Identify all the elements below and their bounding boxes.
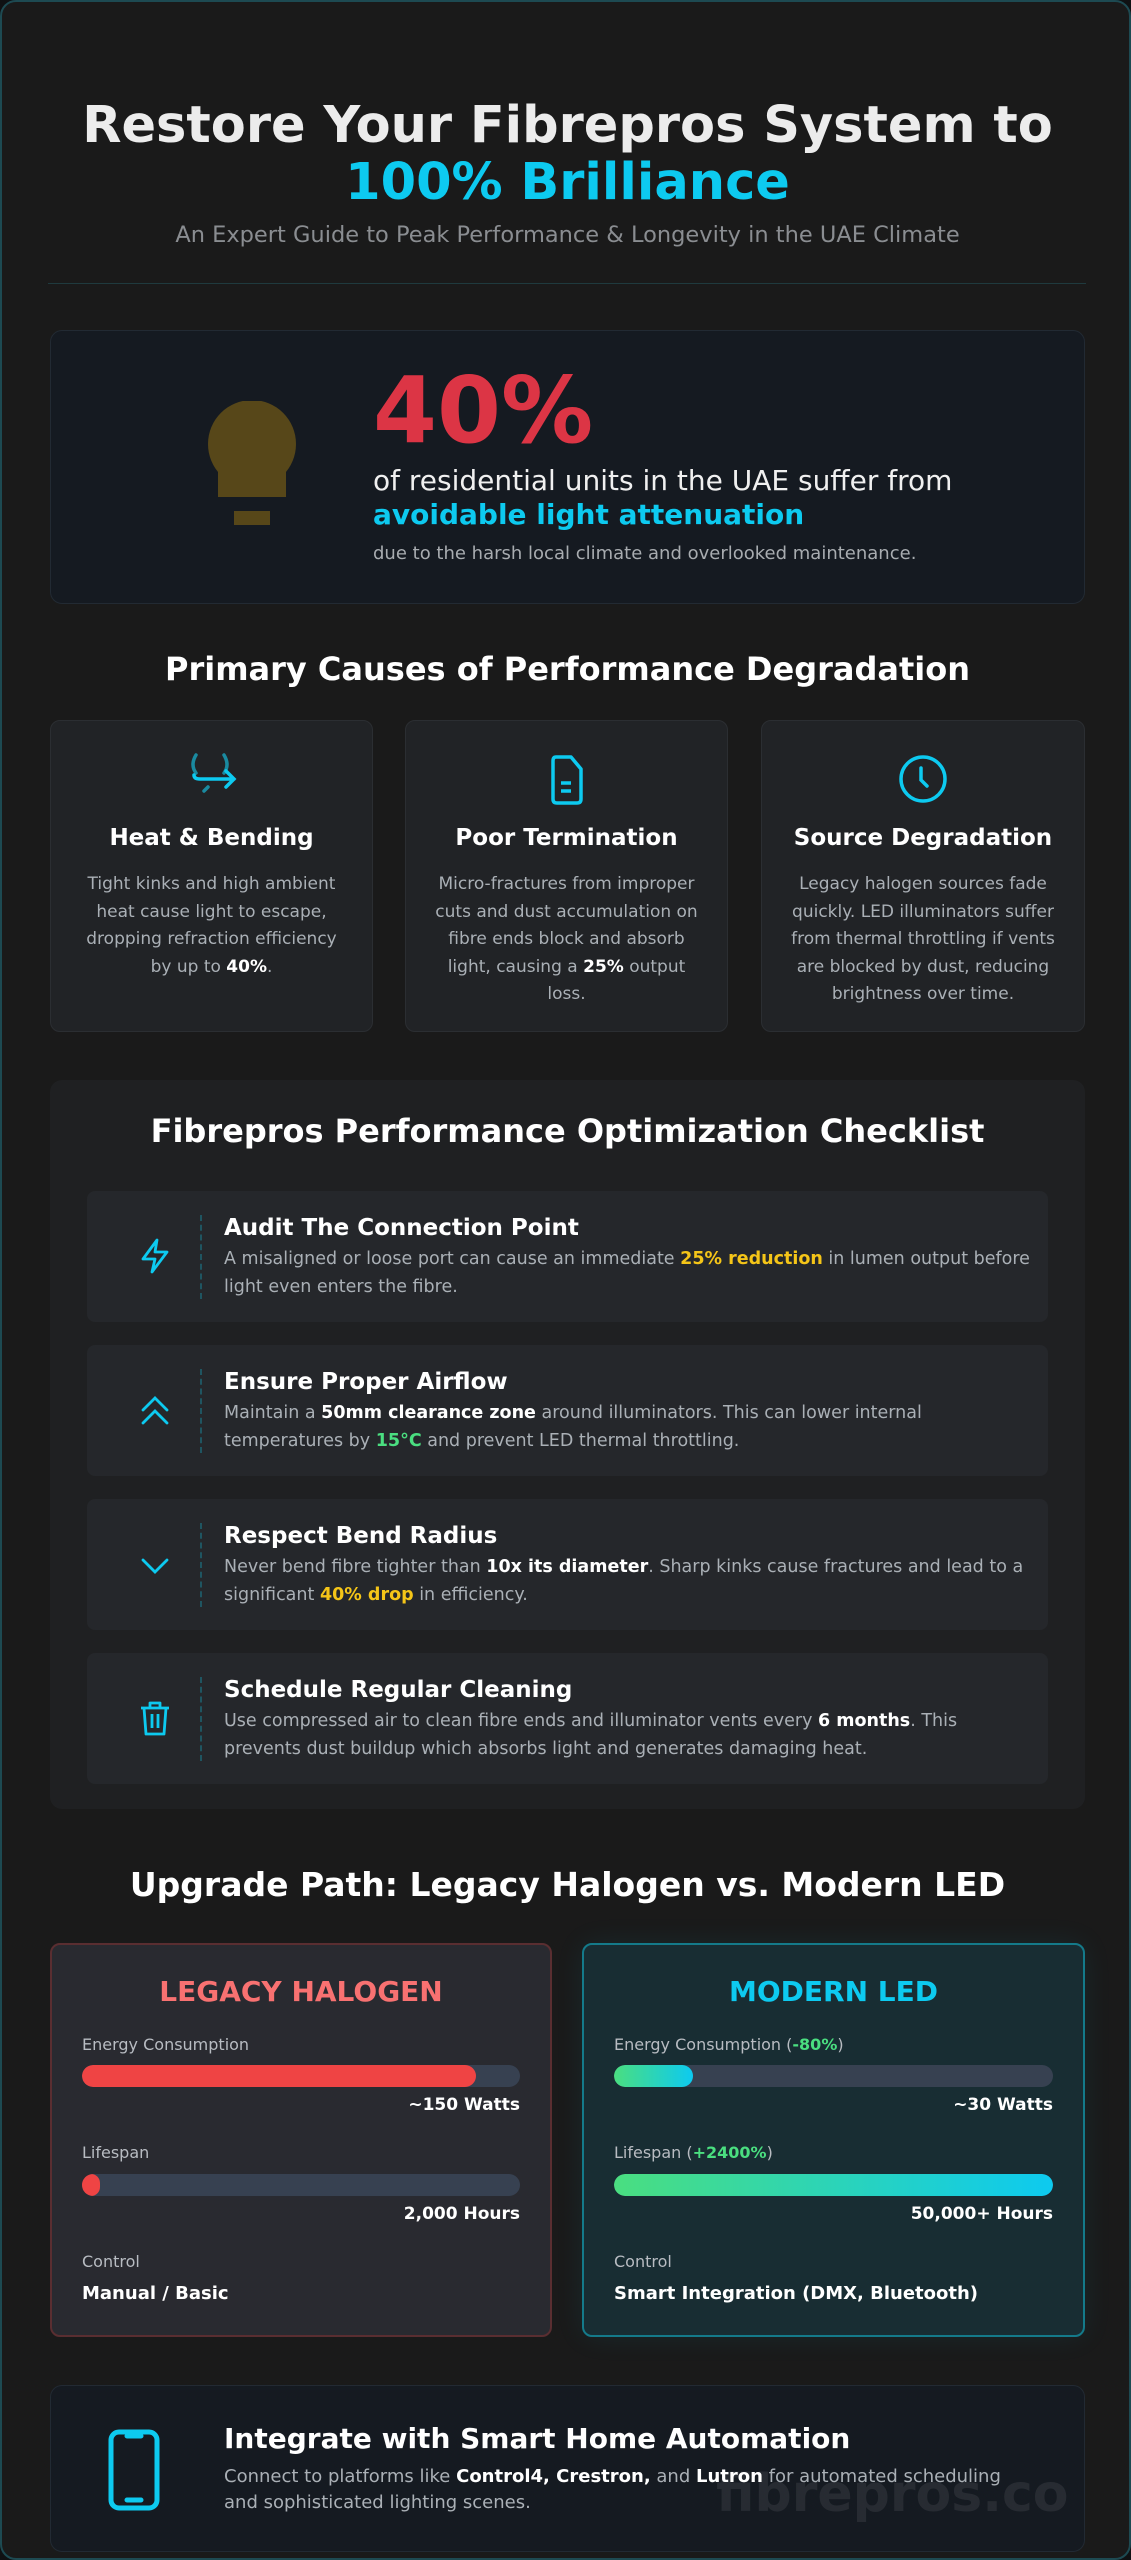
panel: source degradation: Source Degradation xyxy=(794,825,1052,851)
title xyxy=(82,96,1053,212)
smart home title: Integrate with Smart Home Automation xyxy=(224,2422,850,2455)
panel: legacy halogen: Energy Consumption xyxy=(82,2035,249,2054)
stat text xyxy=(373,464,952,531)
panel: stat: due to the harsh local climate and overlooked maintenance. xyxy=(373,543,916,564)
icon: bolt xyxy=(142,1238,168,1274)
stat text: avoidable light attenuation xyxy=(373,498,804,531)
panel: modern led: Control xyxy=(614,2252,672,2271)
checklist item: connection: A misaligned or loose port can cause an immediate 25% reduction in lumen output before light even enters the fibre. xyxy=(224,1249,1030,1297)
icon: document xyxy=(551,755,583,805)
checklist item: connection: Audit The Connection Point xyxy=(224,1215,579,1241)
panel: source degradation xyxy=(761,720,1085,1032)
panel: heat & bending: Tight kinks and high ambient heat cause light to escape, dropping refraction efficiency by up to 40%. xyxy=(86,874,337,976)
bar: halogen energy xyxy=(82,2065,520,2087)
panel: legacy halogen: Control xyxy=(82,2252,140,2271)
stat text: of residential units in the UAE suffer from xyxy=(373,464,952,497)
panel: stat xyxy=(50,330,1085,604)
panel: modern led: Smart Integration (DMX, Bluetooth) xyxy=(614,2283,978,2304)
heading: causes: Primary Causes of Performance Degradation xyxy=(165,650,970,688)
heading: upgrade path: Upgrade Path: Legacy Halogen vs. Modern LED xyxy=(130,1865,1005,1904)
stat number: 40% xyxy=(373,357,593,464)
bar: led lifespan xyxy=(614,2174,1053,2196)
icon: bulb xyxy=(208,401,296,525)
icon: clock xyxy=(899,755,947,803)
panel: modern led: Energy Consumption (-80%) xyxy=(614,2035,844,2054)
panel: heat & bending xyxy=(50,720,373,1032)
icon: double chevron up xyxy=(142,1396,168,1424)
icon: phone xyxy=(108,2430,160,2510)
bar: halogen lifespan xyxy=(82,2174,520,2196)
subtitle: An Expert Guide to Peak Performance & Longevity in the UAE Climate xyxy=(175,222,960,248)
panel: poor termination xyxy=(405,720,728,1032)
title: 100% Brilliance xyxy=(345,153,790,212)
checklist item: airflow: Ensure Proper Airflow xyxy=(224,1369,508,1395)
panel: heat & bending: Heat & Bending xyxy=(109,825,314,851)
panel: checklist xyxy=(50,1080,1085,1809)
checklist item: bend radius: Respect Bend Radius xyxy=(224,1523,497,1549)
panel: legacy halogen: Lifespan xyxy=(82,2143,149,2162)
icon: trash xyxy=(141,1702,169,1736)
bar: led energy xyxy=(614,2065,1053,2087)
icon: bend arrow xyxy=(191,753,236,793)
panel: modern led: 50,000+ Hours xyxy=(911,2204,1053,2224)
title: Restore Your Fibrepros System to xyxy=(82,96,1053,155)
panel: modern led: Lifespan (+2400%) xyxy=(614,2143,773,2162)
checklist item: cleaning xyxy=(87,1653,1048,1784)
checklist item: airflow xyxy=(87,1345,1048,1476)
panel: source degradation: Legacy halogen sources fade quickly. LED illuminators suffer from thermal throttling if vents are blocked by dust, reducing brightness over time. xyxy=(791,874,1055,1004)
panel: legacy halogen: 2,000 Hours xyxy=(404,2204,520,2224)
checklist item: cleaning: Use compressed air to clean fibre ends and illuminator vents every 6 months. This prevents dust buildup which absorbs light and generates damaging heat. xyxy=(224,1711,957,1759)
panel: legacy halogen xyxy=(50,1943,552,2337)
panel: smart home xyxy=(50,2385,1085,2552)
smart home text: Connect to platforms like Control4, Crestron, and Lutron for automated scheduling and sophisticated lighting scenes. xyxy=(224,2466,1001,2513)
panel: poor termination: Micro-fractures from improper cuts and dust accumulation on fibre ends block and absorb light, causing a 25% output loss. xyxy=(435,874,698,1004)
panel: poor termination: Poor Termination xyxy=(455,825,678,851)
checklist item: cleaning: Schedule Regular Cleaning xyxy=(224,1677,572,1703)
panel: legacy halogen: ~150 Watts xyxy=(408,2095,520,2115)
panel: legacy halogen: LEGACY HALOGEN xyxy=(159,1975,443,2008)
checklist item: bend radius: Never bend fibre tighter than 10x its diameter. Sharp kinks cause fractures and lead to a significant 40% drop in efficiency. xyxy=(224,1557,1023,1605)
watermark: fibrepros.co xyxy=(716,2464,1069,2524)
checklist item: bend radius xyxy=(87,1499,1048,1630)
panel: modern led: MODERN LED xyxy=(729,1975,938,2008)
heading: checklist: Fibrepros Performance Optimization Checklist xyxy=(151,1112,984,1150)
panel: modern led xyxy=(582,1943,1085,2337)
checklist item: connection xyxy=(87,1191,1048,1322)
panel: legacy halogen: Manual / Basic xyxy=(82,2283,229,2304)
checklist item: airflow: Maintain a 50mm clearance zone around illuminators. This can lower internal temperatures by 15°C and prevent LED thermal throttling. xyxy=(224,1403,922,1451)
icon: chevron down xyxy=(142,1558,168,1574)
panel: modern led: ~30 Watts xyxy=(953,2095,1053,2115)
